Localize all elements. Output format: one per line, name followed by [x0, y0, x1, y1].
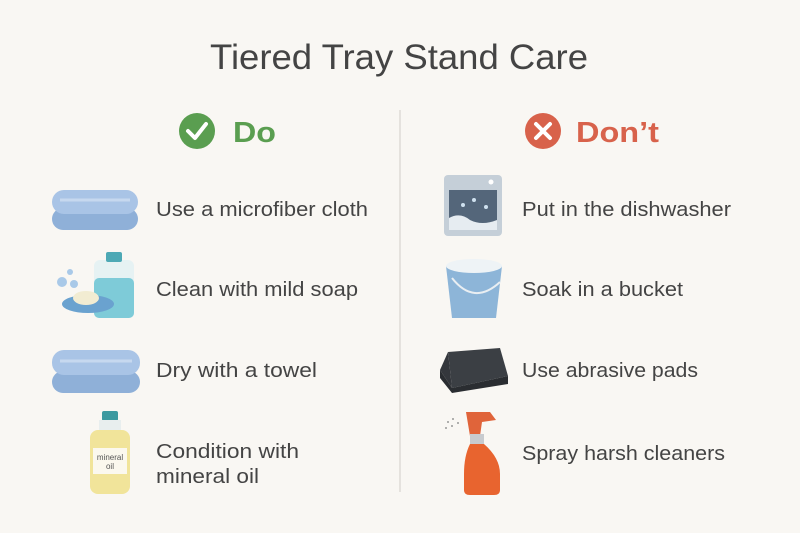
text: spray: Spray harsh cleaners — [522, 443, 725, 465]
title: Tiered Tray Stand Care — [210, 38, 588, 77]
icon: dishwasher — [444, 175, 502, 236]
text: condition: Condition with — [156, 441, 299, 463]
icon: spray bottle — [445, 412, 500, 495]
text: mild soap: Clean with mild soap — [156, 279, 358, 301]
icon: folded towel — [52, 190, 138, 230]
icon: bucket — [446, 259, 502, 318]
text: dishwasher: Put in the dishwasher — [522, 199, 731, 221]
text: abrasive: Use abrasive pads — [522, 360, 698, 382]
heading: Don't: Don’t — [576, 117, 659, 149]
icon: towel — [52, 350, 140, 393]
icon: mineral oil bottle: oil — [106, 462, 114, 471]
text: microfiber: Use a microfiber cloth — [156, 199, 368, 221]
heading: Do: Do — [233, 117, 276, 149]
heading: Do — [179, 113, 276, 149]
icon: mineral oil bottle — [90, 411, 130, 494]
text: condition — [156, 441, 299, 488]
icon: abrasive pad — [440, 348, 508, 393]
icon: soap — [57, 252, 134, 318]
text: condition: mineral oil — [156, 466, 259, 488]
text: bucket: Soak in a bucket — [522, 279, 683, 301]
heading: Don't — [525, 113, 659, 149]
text: dry: Dry with a towel — [156, 360, 317, 382]
icon: mineral oil bottle: mineral — [97, 453, 123, 462]
